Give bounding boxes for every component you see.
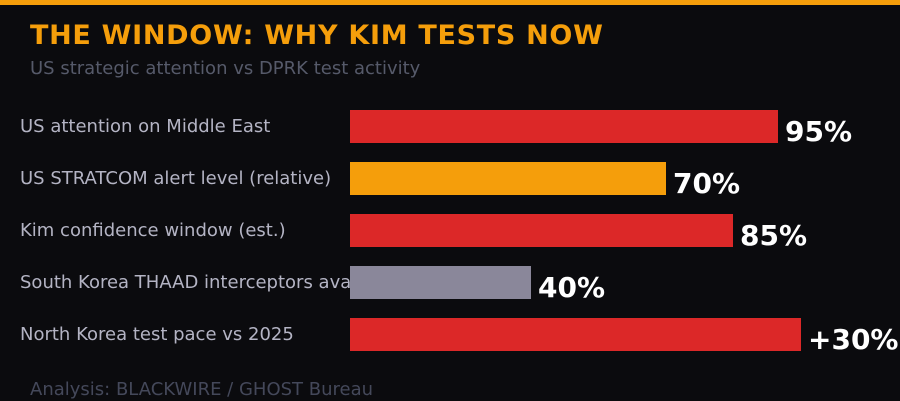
row 4 — [20, 266, 605, 304]
row 3: Kim confidence window (est.) — [20, 220, 286, 241]
top accent bar — [0, 0, 900, 5]
row 1 — [20, 110, 852, 148]
row 2 — [20, 162, 740, 200]
row 2: 70% — [673, 167, 740, 200]
footer: Analysis: BLACKWIRE / GHOST Bureau — [30, 379, 373, 400]
row 5: North Korea test pace vs 2025 — [20, 324, 294, 345]
row 3 — [20, 214, 807, 252]
row 4: 40% — [538, 271, 605, 304]
subtitle: US strategic attention vs DPRK test activity — [30, 58, 420, 79]
row 1: US attention on Middle East — [20, 116, 270, 137]
row 1: 95% — [785, 115, 852, 148]
title: THE WINDOW: WHY KIM TESTS NOW — [30, 20, 604, 51]
row 2: US STRATCOM alert level (relative) — [20, 168, 331, 189]
row 5: +30% — [808, 323, 898, 356]
row 3: 85% — [740, 219, 807, 252]
row 5 — [20, 318, 898, 356]
